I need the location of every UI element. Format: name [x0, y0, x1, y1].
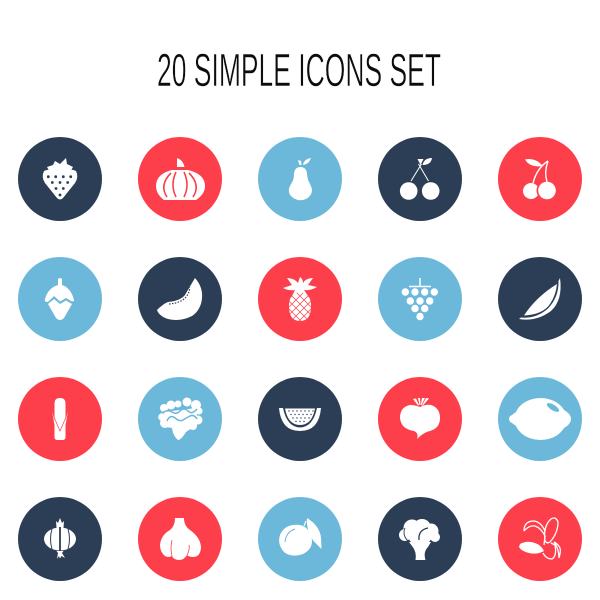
icon: twin cherries with thin stems: [378, 137, 462, 221]
icon: grapes: [378, 257, 462, 341]
icon: lettuce: [138, 377, 222, 461]
icon: watermelon wedge: [498, 257, 582, 341]
icon: corn: [18, 377, 102, 461]
icon: garlic: [138, 497, 222, 581]
icon: broccoli: [378, 497, 462, 581]
icon: watermelon half with seeds: [258, 377, 342, 461]
icon: banana: [498, 497, 582, 581]
icon: plum: [258, 497, 342, 581]
icon: melon slice: [138, 257, 222, 341]
icon: pomegranate: [18, 497, 102, 581]
icon: turnip: [378, 377, 462, 461]
icon: onion: [138, 137, 222, 221]
icon: pineapple: [258, 257, 342, 341]
icon: pear: [258, 137, 342, 221]
icon: strawberry: [18, 137, 102, 221]
icon: lemon: [498, 377, 582, 461]
icon: cherries: [498, 137, 582, 221]
icon: hop cone: [18, 257, 102, 341]
